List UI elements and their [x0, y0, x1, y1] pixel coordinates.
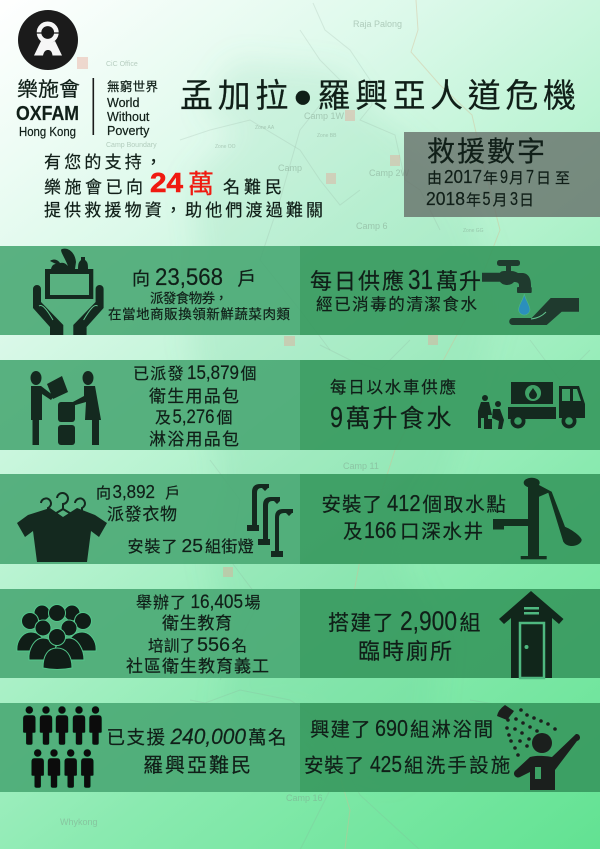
panel: hygiene education: 衛生教育 — [162, 614, 232, 633]
panel: hygiene kits: 5,276 — [172, 407, 214, 428]
panel: showers and handwashing — [300, 703, 600, 792]
panel: temporary latrines — [300, 589, 600, 678]
background camp map: Zone OO — [215, 144, 236, 150]
panel: relief figures date box: 救援數字 — [427, 136, 545, 167]
panel: hygiene education: 556 — [197, 635, 230, 656]
panel: food vouchers: 23,568 — [155, 264, 223, 291]
background camp map: Camp 6 — [356, 221, 388, 231]
panel: clothing and street lights: 組街燈 — [205, 538, 254, 556]
icon: hands holding food box — [33, 249, 104, 335]
title: 孟加拉●羅興亞人道危機 — [180, 77, 576, 114]
intro statement: 萬 — [188, 169, 214, 199]
panel: hygiene education — [0, 589, 300, 678]
panel: clean water supply — [300, 246, 600, 335]
icon: people handing kits — [30, 371, 101, 445]
panel: clothing and street lights: 派發衣物 — [107, 505, 177, 524]
logo: Oxfam Hong Kong: Poverty — [107, 124, 150, 138]
panel: relief figures date box: 年 — [483, 170, 498, 187]
background camp map: Camp 2W — [369, 168, 410, 178]
panel: Rohingya refugees supported: 萬名 — [248, 727, 288, 748]
background camp map: Camp Boundary — [106, 142, 157, 149]
icon: water drop — [518, 294, 530, 315]
panel: hygiene education: 培訓了 — [148, 637, 196, 655]
panel: relief figures date box: 5 — [482, 189, 490, 209]
logo: Oxfam Hong Kong — [16, 10, 158, 139]
panel: hygiene education: 社區衛生教育義工 — [126, 657, 269, 676]
panel: Rohingya refugees supported — [0, 703, 300, 792]
panel: water trucking: 9 — [330, 402, 343, 434]
panel: hygiene education: 16,405 — [190, 592, 243, 613]
panel: Rohingya refugees supported: 240,000 — [170, 724, 247, 749]
background camp map: Camp 11 — [343, 461, 379, 471]
panel: temporary latrines: 搭建了 — [328, 612, 395, 635]
panel: relief figures date box: 至 — [555, 170, 570, 187]
panel: clothing and street lights: 戶 — [161, 485, 180, 502]
panel: showers and handwashing: 組淋浴間 — [410, 719, 495, 741]
panel: relief figures date box: 2018 — [426, 189, 465, 209]
panel: food vouchers — [0, 246, 300, 335]
panel: food vouchers: 派發食物券， — [150, 290, 228, 306]
panel: showers and handwashing: 安裝了 — [304, 755, 365, 777]
logo: Oxfam Hong Kong: Without — [107, 110, 150, 124]
panel: relief figures date box: 日 — [519, 192, 534, 209]
panel: hygiene education: 名 — [232, 637, 247, 655]
panel: clothing and street lights: 25 — [182, 536, 203, 556]
panel: relief figures date box: 2017 — [444, 167, 482, 187]
background camp map: Raja Palong — [353, 19, 402, 29]
panel: relief figures date box: 年 — [466, 192, 481, 209]
panel: hygiene kits: 個 — [240, 365, 257, 383]
panel: Rohingya refugees supported: 羅興亞難民 — [143, 754, 251, 777]
intro statement — [44, 153, 323, 220]
background camp map: Zone BB — [317, 133, 337, 139]
panel: water points and wells — [300, 474, 600, 564]
panel: clothing and street lights: 向 — [96, 485, 111, 502]
panel: temporary latrines: 組 — [460, 612, 480, 635]
intro statement: 提供救援物資，助他們渡過難關 — [44, 201, 323, 220]
panel: Rohingya refugees supported: 已支援 — [106, 727, 167, 748]
panel: clothing and street lights: 3,892 — [112, 482, 155, 502]
panel: hygiene education: 舉辦了 — [136, 594, 187, 612]
background camp map: Zone AA — [255, 125, 275, 131]
panel: hygiene kits: 淋浴用品包 — [149, 430, 239, 449]
panel: temporary latrines: 2,900 — [400, 606, 457, 636]
panel: water points and wells: 個取水點 — [422, 494, 508, 516]
panel: water points and wells: 166 — [364, 517, 396, 543]
panel: hygiene kits: 已派發 — [133, 365, 185, 383]
panel: food vouchers: 戶 — [232, 268, 256, 290]
panel: food vouchers: 向 — [132, 269, 150, 289]
icon: person showering — [497, 705, 580, 790]
panel: hygiene kits: 及 — [155, 410, 171, 427]
logo: Oxfam Hong Kong: World — [107, 96, 139, 110]
background camp map: Zone GG — [463, 228, 484, 234]
icon: hand water pump — [493, 478, 582, 559]
panel: relief figures date box: 月 — [509, 170, 524, 187]
panel: water points and wells: 及 — [343, 521, 363, 543]
panel: relief figures date box: 由 — [427, 170, 442, 187]
logo: Oxfam Hong Kong: Hong Kong — [19, 125, 76, 139]
panel: clean water supply: 萬升 — [436, 269, 482, 294]
panel: water points and wells: 412 — [387, 490, 420, 516]
intro statement: 有您的支持， — [44, 153, 162, 172]
panel: hygiene kits — [0, 360, 300, 450]
panel: hygiene kits: 15,879 — [187, 363, 239, 384]
intro statement: 名難民 — [223, 178, 282, 197]
icon: latrine hut — [499, 591, 564, 678]
icon: rows of people — [23, 706, 102, 788]
logo: Oxfam Hong Kong: 無窮世界 — [107, 79, 158, 94]
panel: relief figures date box: 月 — [492, 192, 508, 209]
panel: water trucking: 萬升食水 — [346, 405, 454, 433]
icon: group of people — [17, 604, 96, 670]
intro statement: 24 — [150, 167, 183, 198]
logo roundel — [18, 10, 78, 70]
panel: clean water supply: 每日供應 — [310, 269, 406, 294]
panel: water trucking — [300, 360, 600, 450]
background camp map: Camp 1W — [304, 111, 345, 121]
panel: clean water supply: 經已消毒的清潔食水 — [316, 295, 478, 314]
panel: relief figures date box: 日 — [536, 170, 551, 187]
icon: water truck and workers — [478, 382, 585, 429]
panel: showers and handwashing: 425 — [370, 751, 402, 777]
panel: showers and handwashing: 690 — [375, 715, 408, 741]
panel: hygiene kits: 個 — [216, 409, 233, 427]
panel: temporary latrines: 臨時廁所 — [358, 639, 452, 664]
background camp map: Camp 16 — [286, 793, 323, 803]
background camp map: Camp — [278, 163, 302, 173]
panel: water points and wells: 安裝了 — [322, 494, 383, 516]
icon: tap and hand — [482, 260, 579, 325]
panel: hygiene education: 場 — [244, 594, 261, 612]
panel: clothing and street lights: 安裝了 — [128, 538, 179, 556]
panel: water trucking: 每日以水車供應 — [330, 377, 456, 397]
panel: clothing and street lights — [0, 474, 300, 564]
logo: Oxfam Hong Kong: 樂施會 — [17, 78, 80, 101]
panel: relief figures date box — [404, 132, 600, 217]
panel: relief figures date box: 9 — [500, 167, 508, 187]
intro statement: 樂施會已向 — [44, 178, 143, 197]
icon: shirts on hangers — [17, 493, 107, 562]
panel: relief figures date box: 3 — [510, 189, 518, 209]
panel: hygiene kits: 衛生用品包 — [149, 387, 239, 406]
panel: showers and handwashing: 興建了 — [310, 719, 372, 741]
panel: relief figures date box: 7 — [526, 167, 534, 187]
panel: food vouchers: 在當地商販換領新鮮蔬菜肉類 — [108, 307, 290, 322]
panel: water points and wells: 口深水井 — [400, 521, 485, 543]
panel: clean water supply: 31 — [408, 264, 433, 295]
icon: street lights — [247, 484, 293, 557]
panel: showers and handwashing: 組洗手設施 — [404, 755, 513, 777]
background camp map: Whykong — [60, 817, 98, 827]
background camp map: CiC Office — [106, 61, 138, 68]
logo: Oxfam Hong Kong: OXFAM — [16, 103, 79, 125]
